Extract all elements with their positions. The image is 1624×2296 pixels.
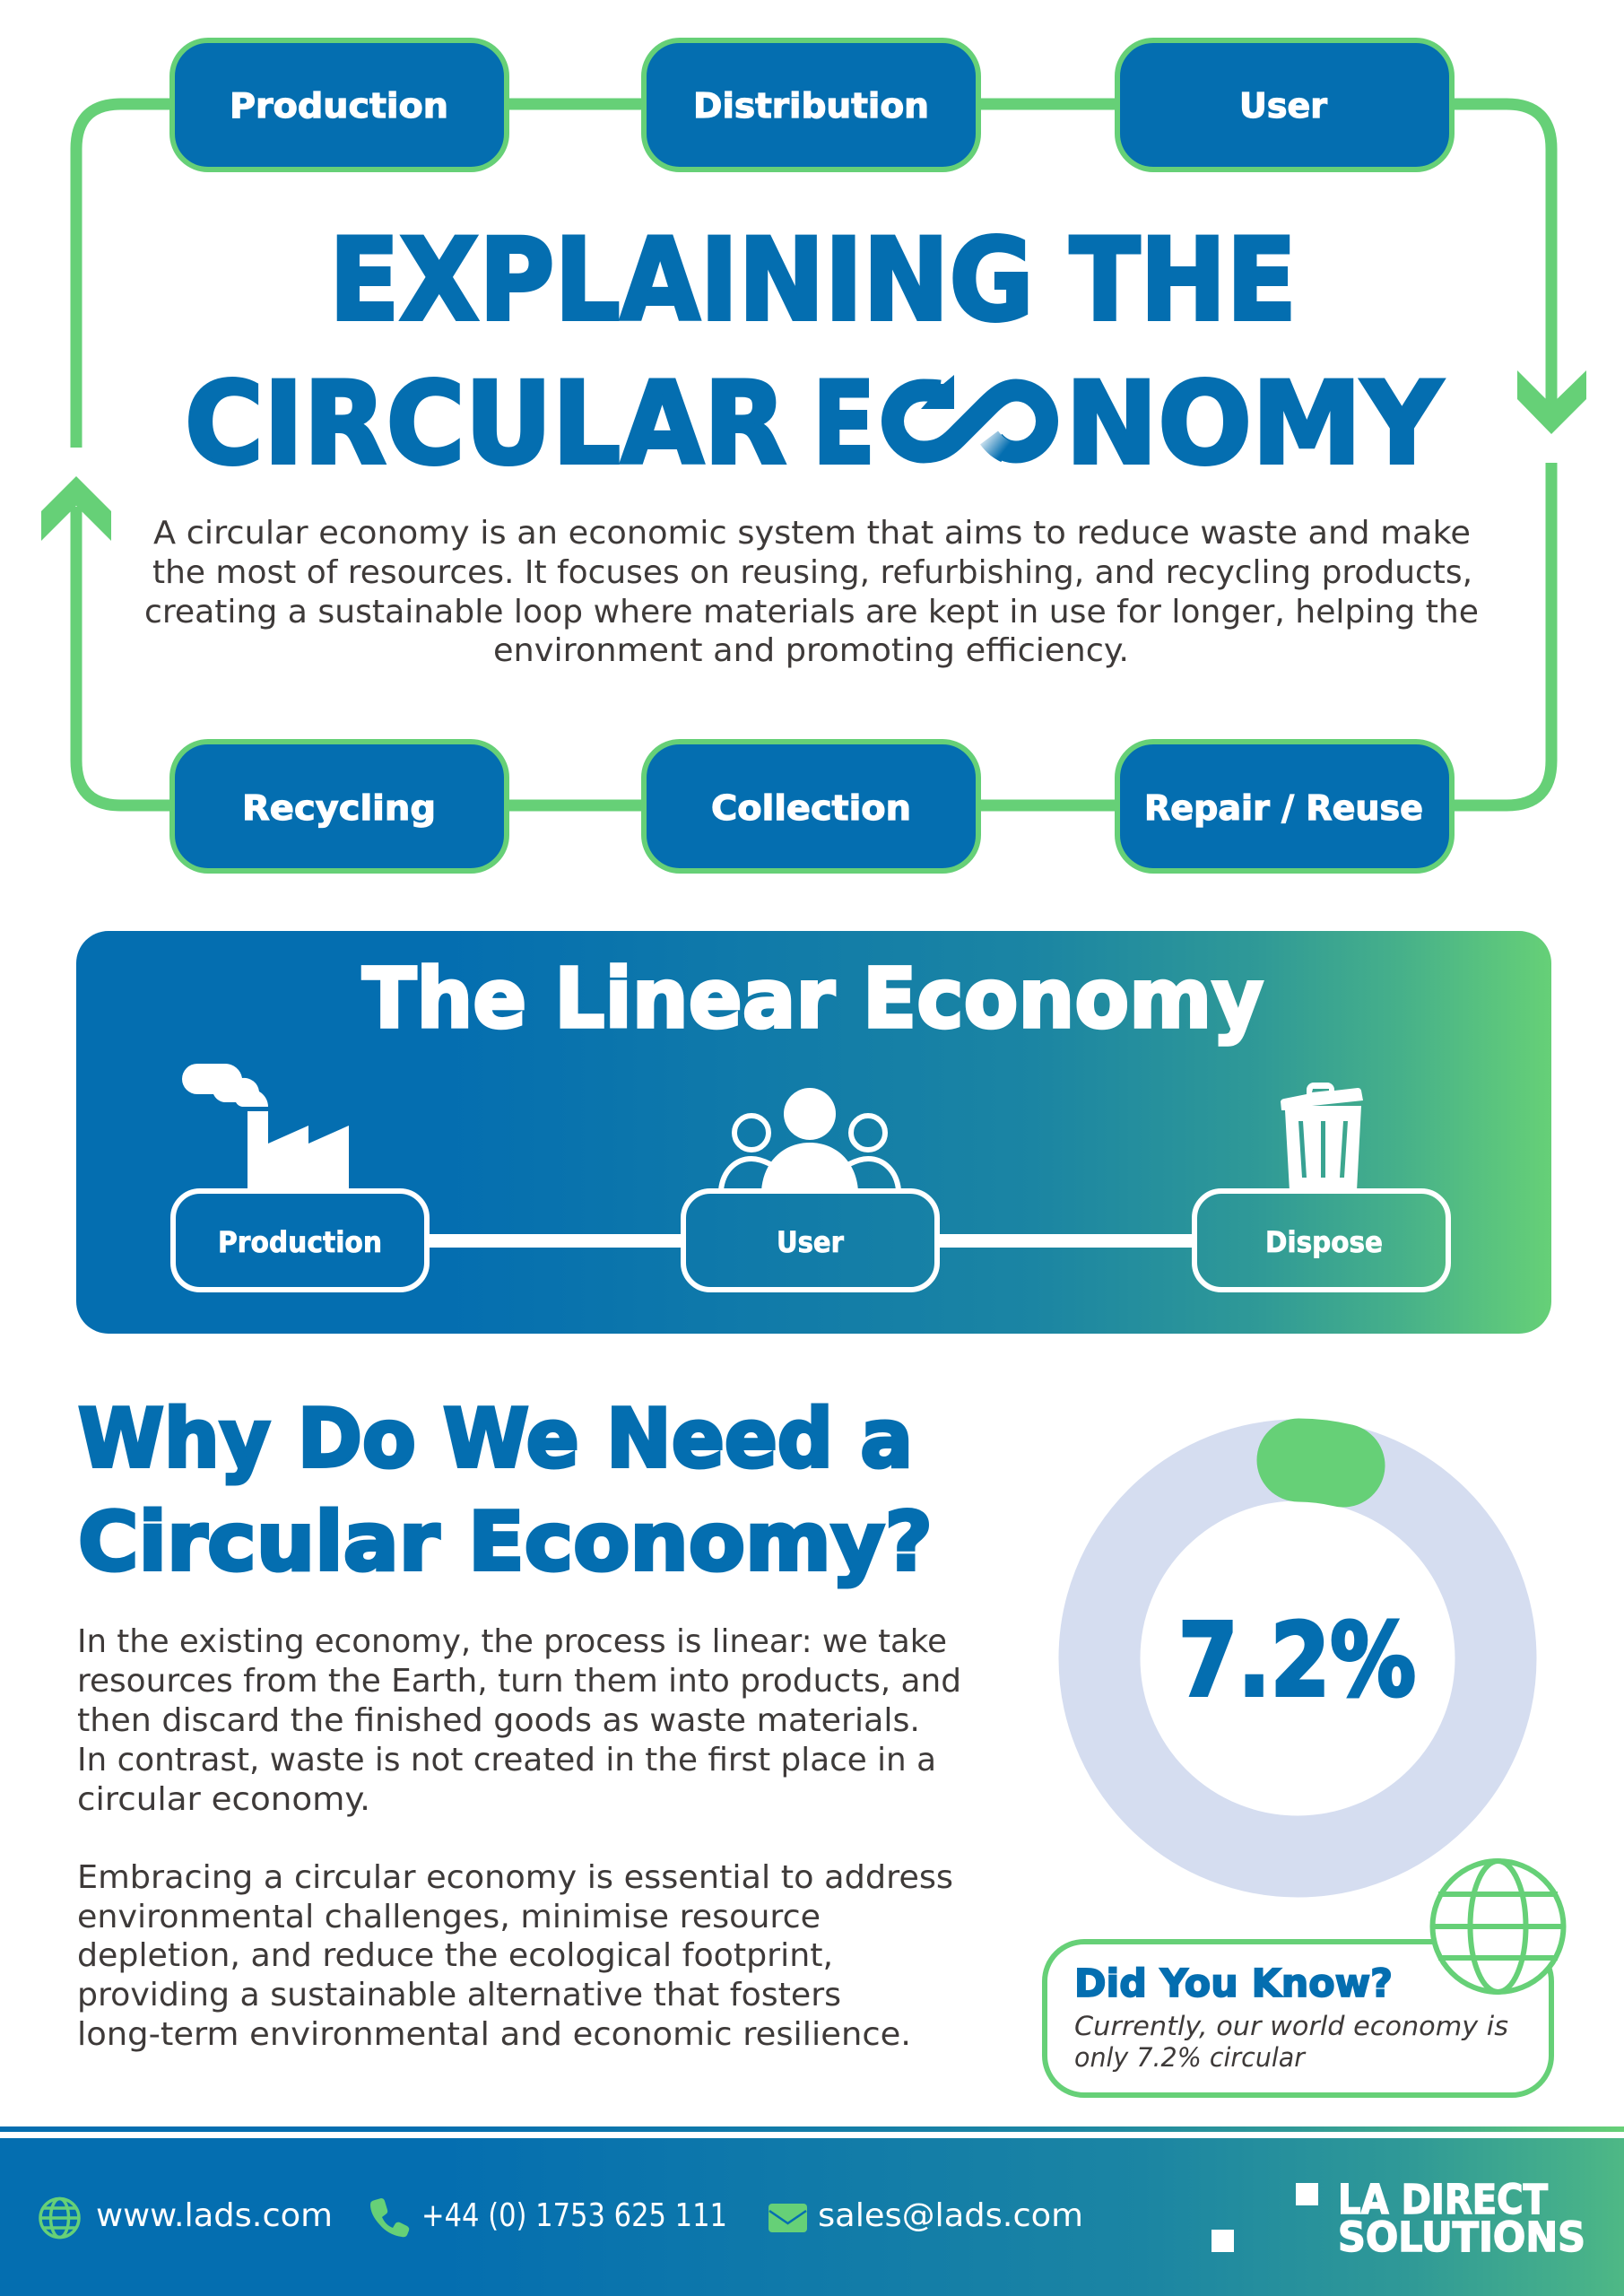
connector lines bbox=[430, 1234, 1194, 1248]
icon: phone bbox=[370, 2198, 409, 2237]
step: Distribution: Distribution bbox=[693, 86, 929, 126]
text block: embracing a circular economy: providing a sustainable alternative that fosters bbox=[77, 1977, 841, 2013]
step: Collection: Collection bbox=[711, 788, 911, 828]
text block: existing economy: circular economy. bbox=[77, 1781, 370, 1818]
text block: did you know body: only 7.2% circular bbox=[1074, 2042, 1307, 2073]
icon: people bbox=[721, 1088, 899, 1191]
heading: why do we need a circular economy: Circular Economy? bbox=[78, 1495, 933, 1589]
step: Recycling bbox=[172, 742, 507, 871]
panel: the linear economy bbox=[76, 931, 1551, 1334]
node: Production: Production bbox=[218, 1225, 382, 1259]
icon: globe bbox=[1433, 1861, 1564, 1992]
text block: embracing a circular economy: long-term environmental and economic resilience. bbox=[77, 2016, 911, 2053]
heading: The Linear Economy: The Linear Economy bbox=[362, 951, 1264, 1047]
text block: intro paragraph: environment and promoting efficiency. bbox=[493, 632, 1129, 669]
text block: intro paragraph: the most of resources. It focuses on reusing, refurbishing, and recycling products, bbox=[152, 554, 1472, 591]
callout: did you know bbox=[1045, 1861, 1564, 2095]
icon: trash can bbox=[1281, 1083, 1363, 1191]
heading: why do we need a circular economy: Why Do We Need a bbox=[78, 1392, 913, 1486]
text block: existing economy: then discard the finished goods as waste materials. bbox=[77, 1702, 920, 1739]
step: Production: Production bbox=[230, 86, 448, 126]
text block: embracing a circular economy: Embracing a circular economy is essential to address bbox=[77, 1859, 953, 1896]
step: User: User bbox=[1239, 86, 1327, 126]
footer band bbox=[0, 2126, 1624, 2296]
text block: existing economy: resources from the Earth, turn them into products, and bbox=[77, 1663, 961, 1700]
step: Production bbox=[172, 40, 507, 170]
text block: existing economy: In contrast, waste is not created in the first place in a bbox=[77, 1742, 936, 1779]
node: User bbox=[683, 1191, 937, 1290]
logo: LA Direct Solutions: SOLUTIONS bbox=[1338, 2213, 1585, 2261]
icon: infinity loop replacing CO bbox=[893, 375, 1047, 452]
website: www.lads.com bbox=[96, 2197, 333, 2234]
node: User: User bbox=[777, 1225, 844, 1259]
icon: factory bbox=[182, 1064, 349, 1191]
node: Dispose bbox=[1194, 1191, 1448, 1290]
step: Repair / Reuse bbox=[1117, 742, 1452, 871]
email: sales@lads.com bbox=[818, 2197, 1083, 2234]
text block: embracing a circular economy: depletion, and reduce the ecological footprint, bbox=[77, 1937, 833, 1974]
text block: existing economy: In the existing economy, the process is linear: we take bbox=[77, 1623, 947, 1660]
logo: LA Direct Solutions bbox=[1211, 2176, 1585, 2261]
arrow: green loop with direction chevrons bbox=[41, 104, 1586, 805]
heading: why do we need a circular economy bbox=[78, 1392, 933, 1589]
title bbox=[185, 213, 1444, 490]
step: Recycling: Recycling bbox=[242, 788, 436, 828]
node: Production bbox=[173, 1191, 427, 1290]
title: CIRCULAR bbox=[185, 357, 786, 490]
logo: LA Direct Solutions: LA DIRECT bbox=[1338, 2176, 1548, 2223]
title: E bbox=[812, 357, 875, 490]
text block: intro paragraph: A circular economy is an economic system that aims to reduce waste and make bbox=[153, 515, 1471, 552]
step: User bbox=[1117, 40, 1452, 170]
phone number: +44 (0) 1753 625 111 bbox=[421, 2197, 727, 2234]
step: Collection bbox=[644, 742, 978, 871]
panel: circular loop header bbox=[41, 40, 1586, 871]
text block: embracing a circular economy bbox=[77, 1859, 953, 2053]
text block: intro paragraph: creating a sustainable loop where materials are kept in use for longer, helping the bbox=[144, 594, 1479, 631]
title: NOMY bbox=[1065, 357, 1444, 490]
step: Distribution bbox=[644, 40, 978, 170]
step: Repair / Reuse: Repair / Reuse bbox=[1144, 788, 1423, 828]
title: EXPLAINING THE bbox=[329, 213, 1297, 346]
chart: donut 7.2%: 7.2% bbox=[1178, 1603, 1416, 1719]
text block: did you know body: Currently, our world economy is bbox=[1074, 2011, 1508, 2041]
text block: intro paragraph bbox=[144, 515, 1479, 669]
text block: did you know body bbox=[1074, 2011, 1508, 2073]
heading: Did You Know?: Did You Know? bbox=[1074, 1961, 1393, 2006]
text block: embracing a circular economy: environmental challenges, minimise resource bbox=[77, 1899, 821, 1935]
node: Dispose: Dispose bbox=[1265, 1225, 1383, 1259]
icon: web globe bbox=[40, 2199, 79, 2237]
icon: mail bbox=[769, 2204, 807, 2232]
chart: donut 7.2% bbox=[1099, 1460, 1496, 1857]
text block: existing economy bbox=[77, 1623, 961, 1818]
